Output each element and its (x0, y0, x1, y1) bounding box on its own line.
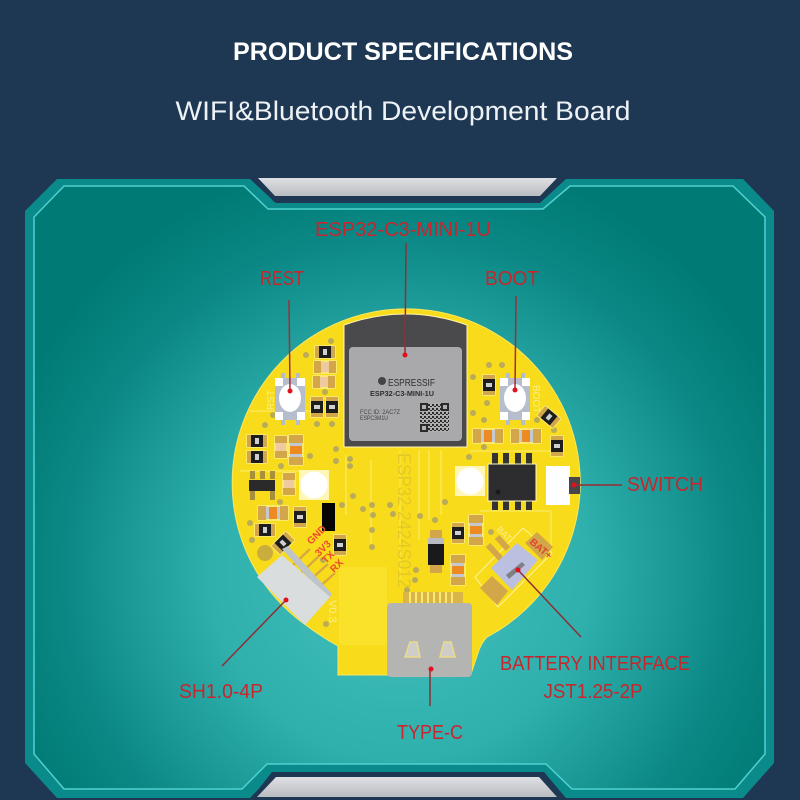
silkscreen: BAT+: BAT+ (527, 537, 554, 562)
label: TYPE-C (397, 666, 463, 744)
label: battery interface: BATTERY INTERFACE (500, 653, 690, 675)
button: boot (500, 373, 530, 425)
label: battery interface (500, 568, 690, 703)
label: REST: REST (260, 268, 304, 290)
module certification line 1: FCC ID: 2AC7Z (360, 410, 400, 416)
subtitle: WIFI&Bluetooth Development Board (176, 96, 630, 126)
silkscreen: connector pin names: GND (305, 524, 329, 547)
SOIC chip (488, 453, 536, 510)
silkscreen: BOOT: BOOT (530, 385, 541, 413)
module: ESP32-C3-MINI-1U (344, 314, 467, 447)
top tab (252, 176, 563, 202)
module logo text: ESPRESSIF (388, 378, 435, 389)
label: ESP32-C3-MINI-1U (315, 219, 491, 358)
module QR code (420, 403, 449, 432)
label: REST (260, 268, 304, 394)
panel: teal frame (25, 179, 774, 798)
silkscreen: version: V0.3 (326, 600, 338, 623)
silkscreen: connector pin names: 3V3 (313, 538, 334, 559)
label: BOOT: BOOT (485, 268, 539, 290)
silkscreen: connector pin names: RX (328, 557, 346, 575)
label: ESP32-C3-MINI-1U: ESP32-C3-MINI-1U (315, 219, 491, 241)
small chips (246, 345, 564, 556)
white tactile pads (299, 466, 485, 500)
label: BOOT (485, 268, 539, 392)
label: SH1.0-4P (179, 598, 288, 703)
vias (247, 338, 557, 627)
circuit board (232, 309, 580, 677)
silkscreen: connector pin names (305, 524, 346, 575)
button: reset (275, 373, 305, 425)
module logo mark (378, 377, 386, 385)
module certification line 2: ESPC3M1U (360, 416, 388, 422)
label: TYPE-C: TYPE-C (397, 722, 463, 744)
title: PRODUCT SPECIFICATIONS (233, 38, 573, 66)
orange resistors (257, 428, 542, 586)
label: battery interface: JST1.25-2P (544, 681, 642, 703)
label: SWITCH (572, 474, 703, 496)
black regulator (322, 503, 335, 531)
small capacitors (274, 360, 337, 496)
USB-C connector (387, 592, 472, 677)
diode (428, 530, 444, 573)
board outline (232, 309, 580, 675)
bottom tab (250, 772, 566, 800)
label: SWITCH: SWITCH (627, 474, 703, 496)
silkscreen: BAT-: BAT- (495, 524, 515, 545)
SH1.0 connector (257, 546, 335, 625)
JST battery connector (475, 528, 553, 607)
silkscreen: connector pin names: TX (320, 549, 337, 566)
SOT chip (249, 471, 275, 500)
copper traces and planes (240, 410, 560, 645)
label: SH1.0-4P: SH1.0-4P (179, 681, 263, 703)
slide switch (546, 466, 580, 505)
silkscreen: RST: RST (266, 390, 277, 410)
module part number: ESP32-C3-MINI-1U (370, 389, 434, 398)
silkscreen: board name: ESP32-2424S012 (394, 453, 414, 588)
